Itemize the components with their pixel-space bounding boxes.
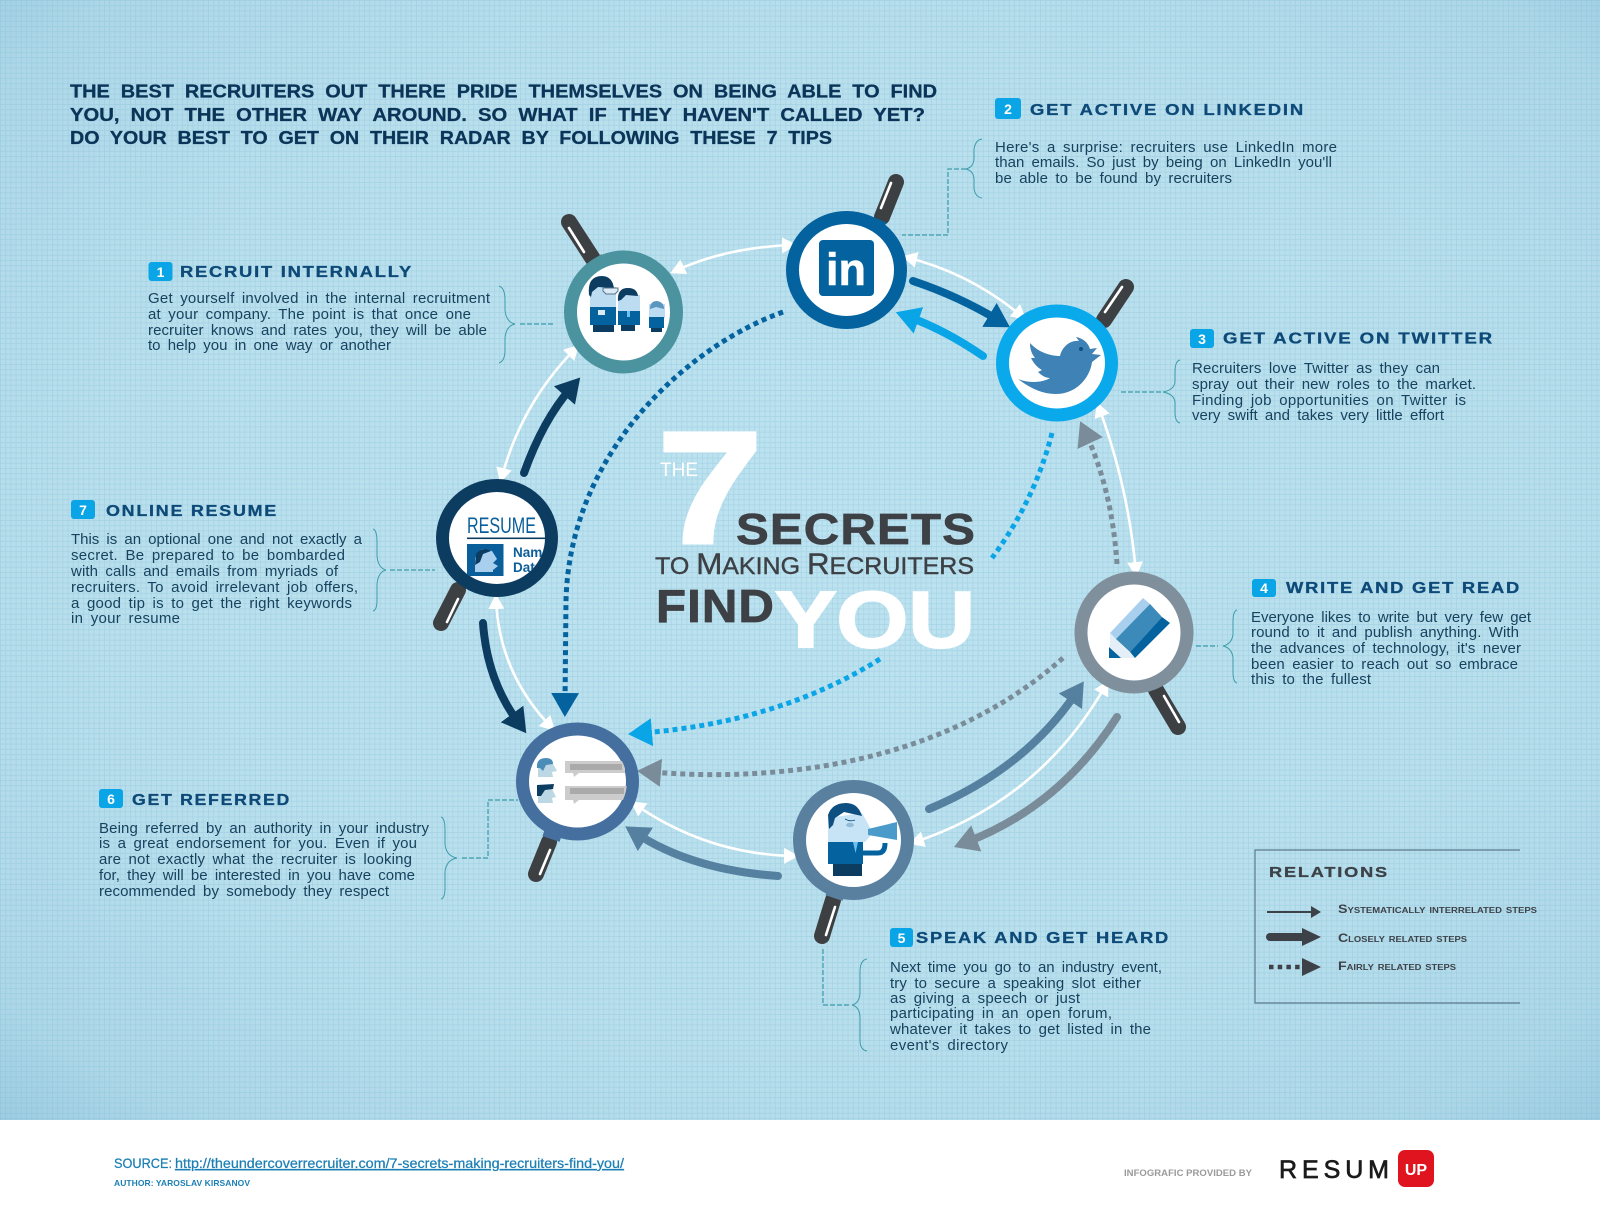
heading 3: GET ACTIVE ON TWITTER bbox=[1223, 330, 1494, 348]
legend row: systematically interrelated: Systematically interrelated steps bbox=[1338, 902, 1538, 916]
icon: resume card bbox=[467, 518, 545, 576]
body 1: at your company. The point is that once one bbox=[148, 306, 471, 323]
body 3 bbox=[1192, 360, 1476, 424]
icon: resume card: Date bbox=[513, 560, 543, 575]
connector 6 bbox=[441, 800, 518, 899]
center title bbox=[655, 398, 976, 664]
magnifier 5: speak bbox=[800, 786, 908, 936]
body 6: Being referred by an authority in your industry bbox=[99, 820, 430, 837]
source line: SOURCE: bbox=[114, 1155, 172, 1171]
badge 7: 7 bbox=[79, 502, 87, 518]
badge 5 bbox=[890, 928, 913, 947]
body 5: try to secure a speaking slot either bbox=[890, 975, 1141, 992]
icon: linkedin logo bbox=[819, 240, 874, 296]
body 1 bbox=[148, 290, 491, 354]
body 2 bbox=[995, 139, 1337, 187]
body 2: Here's a surprise: recruiters use LinkedIn more bbox=[995, 139, 1337, 156]
body 6 bbox=[99, 820, 430, 900]
body 5: event's directory bbox=[890, 1037, 1008, 1054]
connector 7 bbox=[373, 529, 435, 611]
heading 2: GET ACTIVE ON LINKEDIN bbox=[1030, 102, 1305, 119]
center title: TO MAKING RECRUITERS bbox=[655, 548, 974, 581]
body 4: this to the fullest bbox=[1251, 671, 1372, 688]
heading 5: SPEAK AND GET HEARD bbox=[916, 930, 1170, 947]
body 1: recruiter knows and rates you, they will be able bbox=[148, 322, 487, 339]
center title: SECRETS bbox=[736, 505, 976, 554]
icon: resume card: Name bbox=[513, 545, 550, 560]
legend row: fairly related bbox=[1269, 958, 1457, 976]
logo: resumup: RESUM bbox=[1279, 1156, 1389, 1184]
body 2: be able to be found by recruiters bbox=[995, 170, 1232, 187]
badge 2: 2 bbox=[1004, 101, 1012, 117]
body 3: very swift and takes very little effort bbox=[1192, 407, 1445, 424]
panel: step 6 referred bbox=[99, 789, 518, 900]
body 7: a good tip is to get the right keywords bbox=[71, 595, 352, 612]
magnifier 2: linkedin bbox=[792, 182, 900, 322]
body 7: in your resume bbox=[71, 610, 180, 627]
legend row: closely related: Closely related steps bbox=[1338, 931, 1468, 945]
body 4 bbox=[1251, 609, 1532, 688]
provider label: INFOGRAFIC PROVIDED BY bbox=[1124, 1168, 1253, 1179]
body 3: Finding job opportunities on Twitter is bbox=[1192, 392, 1466, 409]
legend row: closely related bbox=[1270, 928, 1468, 946]
badge 1 bbox=[148, 262, 172, 281]
connector 3 bbox=[1121, 360, 1180, 423]
panel: step 5 speak bbox=[823, 928, 1170, 1054]
body 5: Next time you go to an industry event, bbox=[890, 959, 1162, 976]
body 4: the advances of technology, it's never bbox=[1251, 640, 1521, 657]
magnifier 4: write bbox=[1081, 578, 1187, 727]
intro text: DO YOUR BEST TO GET ON THEIR RADAR BY FOLLOWING THESE 7 TIPS bbox=[70, 127, 832, 148]
body 3: spray out their new roles to the market. bbox=[1192, 376, 1476, 393]
body 6: for, they will be interested in you have come bbox=[99, 867, 415, 884]
body 1: to help you in one way or another bbox=[148, 337, 391, 354]
icon: twitter bird bbox=[1018, 337, 1101, 394]
badge 4: 4 bbox=[1260, 580, 1268, 596]
relation arrows: systematic (white, double headed) bbox=[496, 245, 1136, 856]
badge 3: 3 bbox=[1198, 331, 1206, 347]
connector 1 bbox=[499, 286, 555, 363]
body 5: whatever it takes to get listed in the bbox=[889, 1021, 1151, 1038]
logo: resumup bbox=[1279, 1150, 1434, 1187]
logo: resumup: UP bbox=[1405, 1162, 1427, 1179]
legend title: RELATIONS bbox=[1269, 864, 1389, 881]
magnifier 7: resume bbox=[441, 486, 552, 623]
footer bbox=[0, 1120, 1600, 1227]
badge 2 bbox=[995, 98, 1021, 119]
body 1: Get yourself involved in the internal recruitment bbox=[148, 290, 491, 307]
heading 6: GET REFERRED bbox=[132, 792, 291, 809]
legend: relations bbox=[1255, 850, 1538, 1003]
heading 7: ONLINE RESUME bbox=[106, 503, 278, 520]
body 4: been easier to reach out so embrace bbox=[1251, 656, 1518, 673]
connector 4 bbox=[1196, 610, 1237, 683]
author line: AUTHOR: YAROSLAV KIRSANOV bbox=[114, 1178, 250, 1188]
panel: step 4 write bbox=[1196, 579, 1532, 688]
body 7 bbox=[70, 531, 363, 627]
icon: speaker with megaphone bbox=[828, 803, 897, 876]
body 2: than emails. So just by being on LinkedIn you'll bbox=[995, 154, 1332, 171]
panel: step 3 twitter bbox=[1121, 329, 1494, 424]
body 5: as giving a speech or just bbox=[890, 990, 1081, 1007]
icon: resume card: RESUME bbox=[467, 513, 536, 538]
panel: step 7 resume bbox=[70, 500, 435, 627]
badge 1: 1 bbox=[157, 264, 165, 280]
badge 6: 6 bbox=[107, 791, 115, 807]
body 6: is a great endorsement for you. Even if you bbox=[99, 835, 417, 852]
magnifier 6: referred bbox=[522, 729, 632, 874]
center title: 7 bbox=[657, 398, 763, 577]
body 4: Everyone likes to write but very few get bbox=[1251, 609, 1532, 626]
body 5 bbox=[889, 959, 1162, 1054]
intro text: YOU, NOT THE OTHER WAY AROUND. SO WHAT IF THEY HAVEN'T CALLED YET? bbox=[70, 104, 925, 125]
intro text bbox=[70, 80, 937, 148]
relation arrows: fairly related (dotted) bbox=[565, 312, 1117, 775]
legend row: systematically interrelated bbox=[1267, 902, 1538, 918]
intro text: THE BEST RECRUITERS OUT THERE PRIDE THEMSELVES ON BEING ABLE TO FIND bbox=[70, 80, 937, 102]
badge 6 bbox=[99, 789, 123, 808]
center title: YOU bbox=[775, 575, 975, 664]
body 4: round to it and publish anything. With bbox=[1251, 624, 1519, 641]
relation arrows: closely related (thick) bbox=[483, 281, 1117, 876]
body 5: participating in an open forum, bbox=[890, 1005, 1112, 1022]
panel: step 1 recruit internally bbox=[148, 262, 555, 363]
body 3: Recruiters love Twitter as they can bbox=[1192, 360, 1440, 377]
icon: three recruiters bbox=[589, 276, 665, 332]
body 7: recruiters. To avoid irrelevant job offers, bbox=[71, 579, 358, 596]
icon: pencil bbox=[1109, 598, 1170, 658]
body 7: secret. Be prepared to be bombarded bbox=[71, 547, 345, 564]
heading 1: RECRUIT INTERNALLY bbox=[180, 264, 413, 281]
source line: http://theundercoverrecruiter.com/7-secrets-making-recruiters-find-you/ bbox=[175, 1155, 624, 1171]
badge 7 bbox=[71, 500, 95, 519]
icon: two heads and speech bubbles bbox=[537, 758, 627, 804]
badge 4 bbox=[1252, 579, 1276, 597]
heading 4: WRITE AND GET READ bbox=[1286, 580, 1521, 597]
panel: step 2 linkedin bbox=[902, 98, 1337, 235]
center title: THE bbox=[660, 459, 698, 481]
icon: linkedin logo: in bbox=[826, 244, 866, 295]
badge 5: 5 bbox=[898, 930, 906, 946]
connector 5 bbox=[823, 949, 867, 1051]
body 6: are not exactly what the recruiter is looking bbox=[99, 851, 412, 868]
connector 2 bbox=[902, 139, 982, 235]
magnifier 1: people bbox=[569, 222, 676, 367]
body 7: This is an optional one and not exactly a bbox=[71, 531, 363, 548]
body 7: with calls and emails from myriads of bbox=[70, 563, 339, 580]
badge 3 bbox=[1190, 329, 1214, 348]
magnifier 3: twitter bbox=[1002, 287, 1126, 415]
legend row: fairly related: Fairly related steps bbox=[1338, 959, 1457, 973]
body 6: recommended by somebody they respect bbox=[99, 883, 390, 900]
center title: FIND bbox=[656, 580, 775, 632]
